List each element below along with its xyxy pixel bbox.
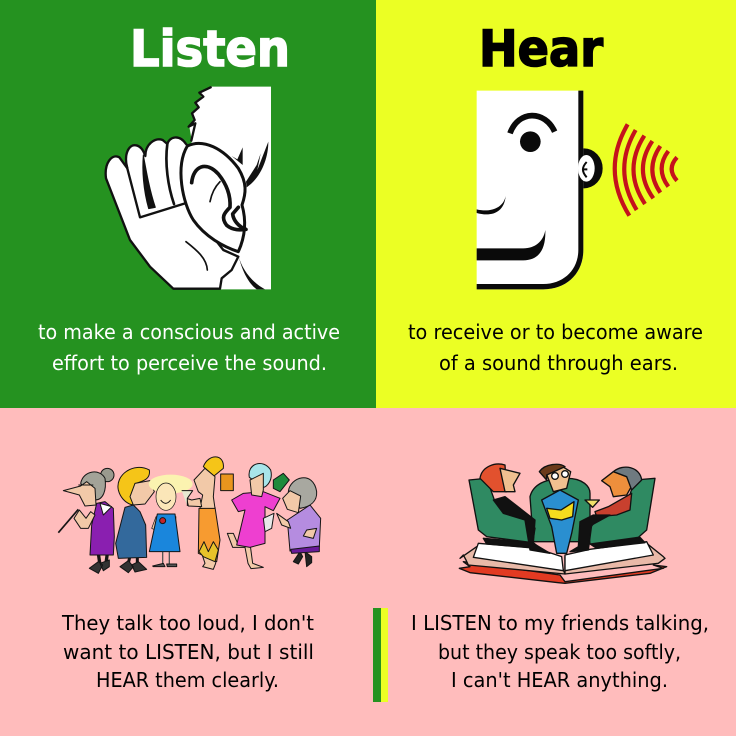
text: listen example (61, 611, 314, 692)
text: listen definition (38, 320, 340, 375)
woman in blue dress (116, 467, 154, 573)
small blonde woman (149, 475, 193, 567)
eyebrow (510, 116, 555, 133)
divider bar: green and yellow (373, 608, 388, 702)
text: hear example: I can't HEAR anything. (451, 668, 668, 692)
eye (520, 131, 541, 152)
cheek line (477, 196, 506, 214)
text: hear definition: of a sound through ears. (439, 351, 678, 375)
text: hear example: I LISTEN to my friends talking, (411, 611, 709, 635)
illustration: friends talking in armchairs on a book (459, 464, 667, 583)
heading: Listen: Listen (130, 20, 290, 78)
text: hear example (411, 611, 709, 692)
middle armchair and man (530, 464, 590, 553)
panel: listen background (0, 0, 376, 408)
sound waves (615, 124, 677, 216)
text: hear definition (408, 320, 703, 375)
face (477, 91, 583, 289)
text: listen example: HEAR them clearly. (96, 668, 279, 692)
left armchair and woman (469, 464, 550, 553)
woman in lavender dress (277, 478, 321, 567)
panel: hear background (376, 0, 736, 408)
panel: examples background (0, 408, 736, 736)
illustration: group of talking women (58, 457, 321, 573)
text: hear example: but they speak too softly, (438, 640, 681, 664)
icon: face with ear and sound waves (477, 91, 677, 289)
woman in orange dress (182, 457, 223, 569)
text: hear definition: to receive or to become aware (408, 320, 703, 344)
text: listen example: want to LISTEN, but I still (63, 640, 314, 664)
ear outer (565, 148, 603, 188)
text: listen definition: effort to perceive the sound. (52, 351, 327, 375)
ear inner (578, 155, 595, 182)
woman in pink dress (221, 463, 289, 569)
heading: Hear: Hear (479, 20, 603, 78)
mouth (477, 230, 545, 260)
icon: hand cupped behind ear (106, 87, 271, 289)
right armchair and man (570, 467, 655, 552)
open book (459, 537, 667, 583)
text: listen example: They talk too loud, I don't (61, 611, 314, 635)
woman with pen (58, 468, 114, 573)
text: listen definition: to make a conscious and active (38, 320, 340, 344)
